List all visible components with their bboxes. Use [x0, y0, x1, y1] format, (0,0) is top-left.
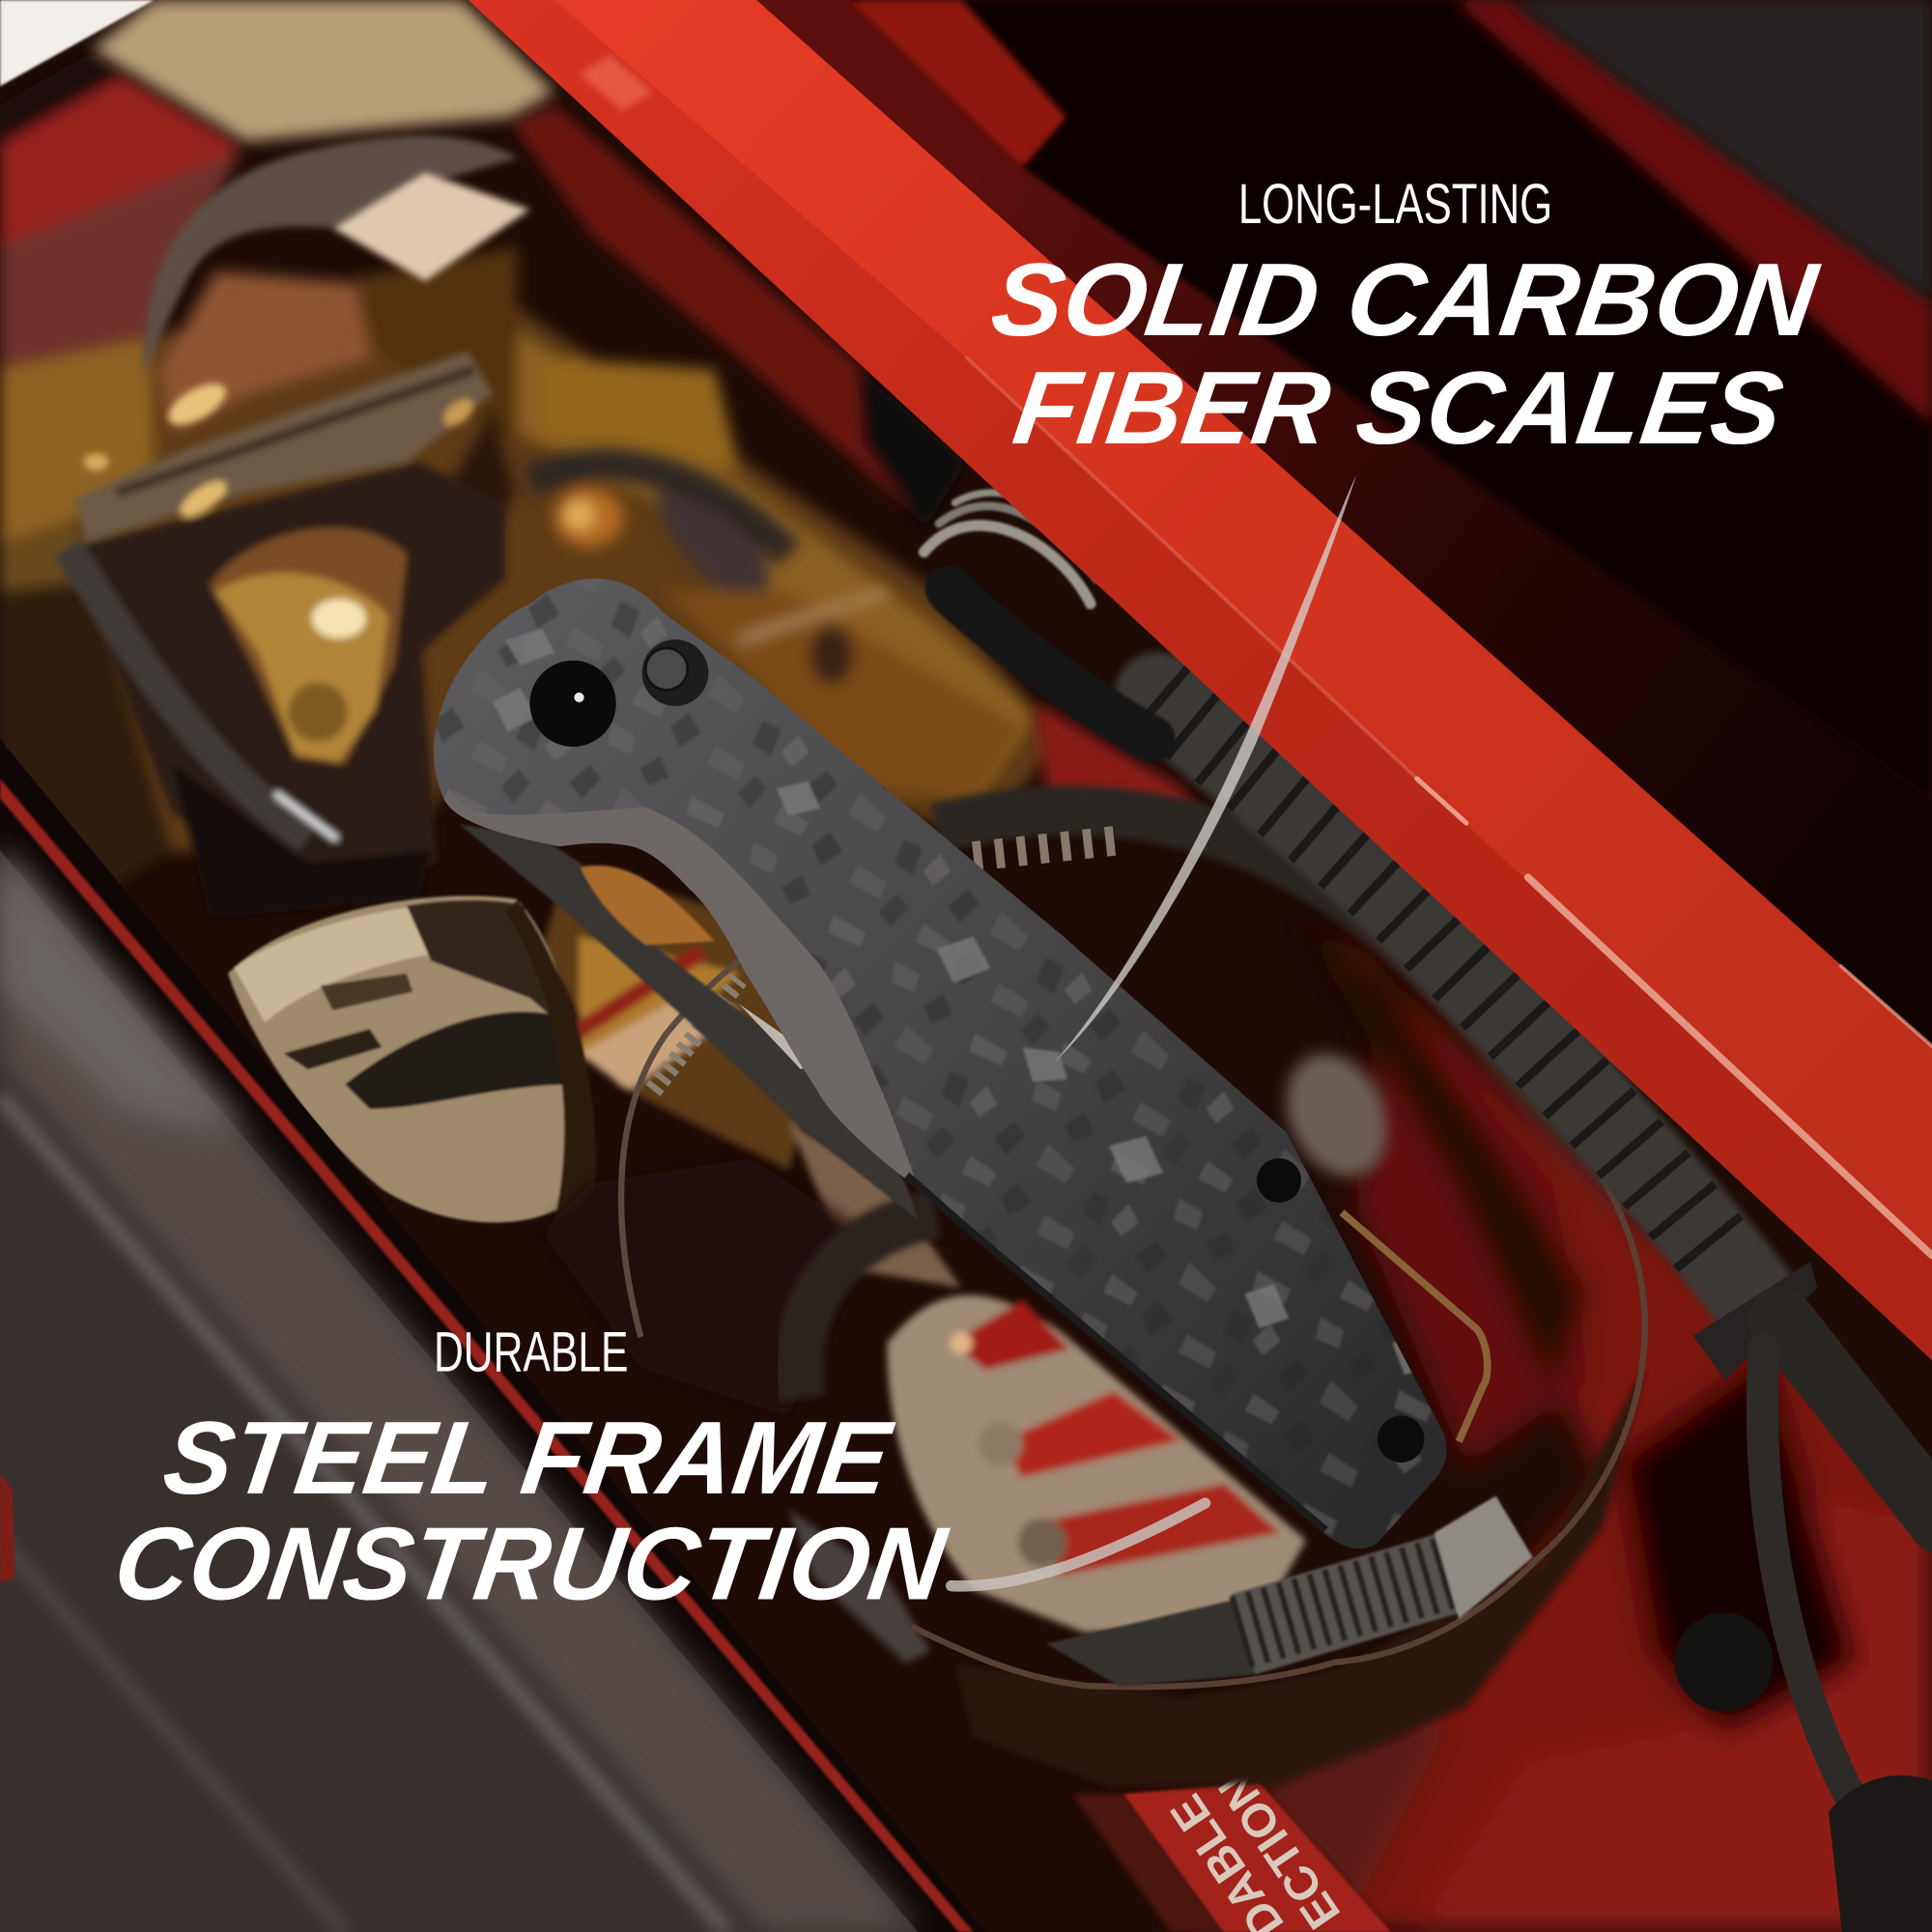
spring: [924, 493, 1152, 739]
white tag: [332, 173, 529, 281]
feature label: long-lasting: LONG-LASTING: [1238, 173, 1552, 236]
dark ring in tray: [529, 465, 1023, 801]
red cut-in behind hose: [1035, 702, 1202, 819]
feature heading: steel frame construction: STEEL FRAME: [157, 1400, 899, 1516]
printed red label: [1072, 1762, 1391, 1932]
capsules: [887, 1295, 1306, 1633]
dark ring around capsules: [799, 1213, 936, 1399]
feature heading: steel frame construction: CONSTRUCTION: [108, 1506, 954, 1621]
callout line: carbon scales: [1055, 474, 1356, 1062]
feature heading: solid carbon fiber scales: FIBER SCALES: [1008, 351, 1790, 466]
feature heading: solid carbon fiber scales: SOLID CARBON: [985, 242, 1826, 357]
knife: pocket clip: [1342, 1212, 1488, 1441]
choil background: [542, 863, 961, 1288]
knife: gray liner band: [443, 788, 925, 1208]
paint can cylinder: [228, 895, 596, 1223]
curved gray hook: [145, 136, 518, 376]
threaded bolt: [1046, 1495, 1533, 1687]
gray toolbox lid: [0, 739, 985, 1932]
rail crease highlight: [966, 357, 1932, 1256]
feature heading: solid carbon fiber scales: [985, 242, 1826, 466]
knife: screw lower: [1378, 1416, 1424, 1463]
rail dark top facet: [756, 0, 1932, 1046]
knife: bright carbon flakes: [493, 629, 1424, 1375]
dark below can: [542, 1158, 863, 1417]
knife: pivot screw: [529, 661, 616, 747]
red rail upper facet: [529, 0, 1932, 1256]
knife: blade tip: [739, 1005, 819, 1069]
beige blob behind knife: [1267, 1037, 1406, 1193]
callout line: steel frame: [952, 1503, 1205, 1586]
paper in tray: [93, 0, 554, 142]
knife: lower edge shadow: [904, 1178, 1323, 1533]
knife: screw upper: [1257, 1158, 1301, 1203]
red floor: [1171, 912, 1932, 1932]
red rail lower facet: [469, 0, 1932, 1360]
upper right gray panel: [1509, 0, 1932, 301]
knife: [433, 578, 1492, 1549]
feature label: durable: DURABLE: [434, 1321, 629, 1384]
toolbox contents, upper left: [0, 52, 1060, 912]
feature heading: steel frame construction: [108, 1400, 954, 1621]
knife: frame strip and blade: [460, 824, 918, 1220]
rail highlight patch: [579, 55, 653, 111]
black upper area: [961, 0, 1932, 801]
upper right red edge: [1454, 0, 1932, 425]
cables, lower right: [1674, 1319, 1932, 1932]
top red block: [850, 0, 1065, 166]
knife: carbon fiber texture: [437, 579, 1432, 1536]
ribbed hose: [1158, 696, 1817, 1380]
clamp slots top: [936, 810, 1614, 1220]
clamp latch: [788, 1509, 930, 1663]
knife: choil opening: [581, 866, 715, 945]
knife: handle scale: [434, 579, 1446, 1548]
clamp ring: [621, 952, 1645, 1786]
knife: thumb stud: [642, 639, 708, 706]
metal shackle: [68, 352, 505, 918]
white corner: [0, 0, 154, 86]
